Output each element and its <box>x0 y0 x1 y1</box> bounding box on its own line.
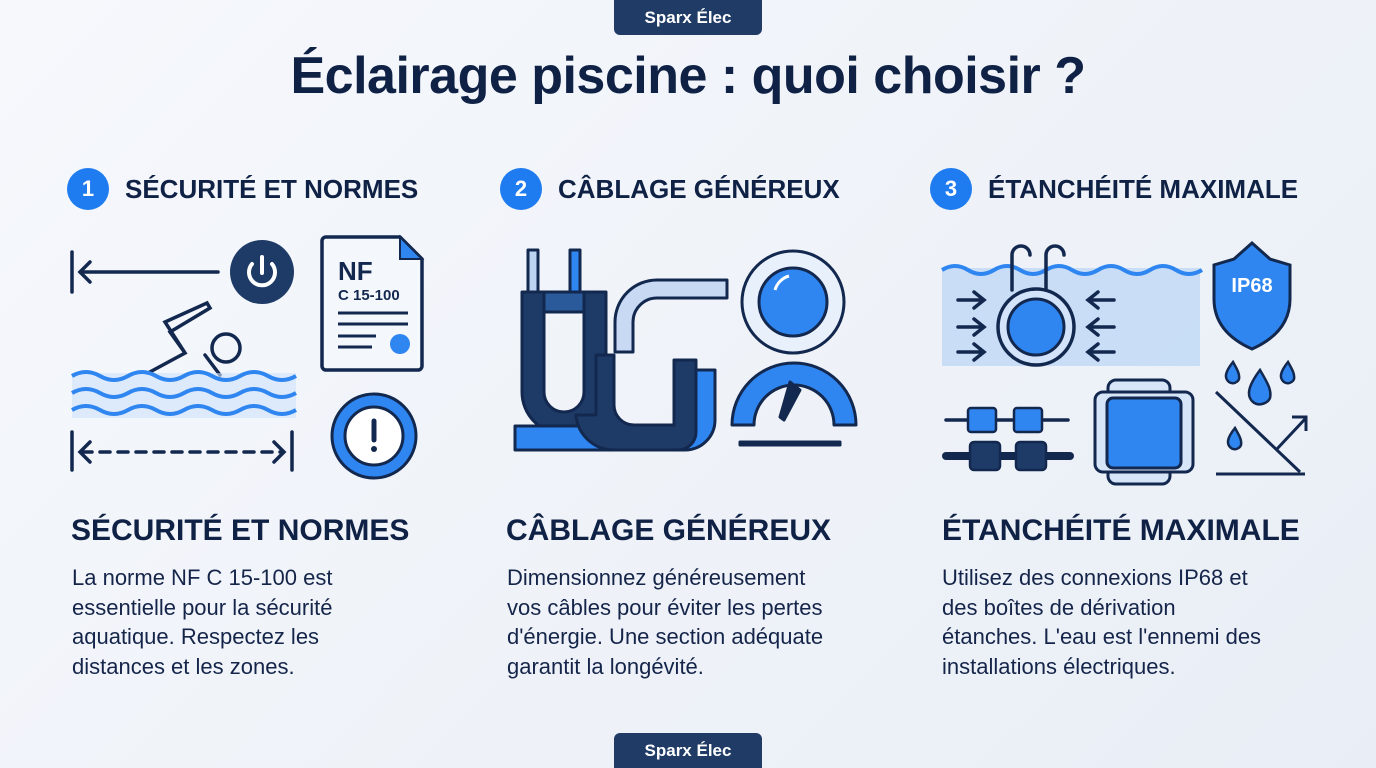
badge bottom <box>614 733 762 768</box>
heading 3 <box>930 168 1298 210</box>
icon group: safety: C 15-100 <box>338 287 400 304</box>
icon group: waterproof: IP68 <box>1231 275 1273 297</box>
badge bottom: Sparx Élec <box>645 741 731 760</box>
badge top: Sparx Élec <box>645 8 731 27</box>
icon group: waterproof <box>941 241 1308 486</box>
heading 1: SÉCURITÉ ET NORMES <box>125 174 418 204</box>
text 1: La norme NF C 15-100 est essentielle pour la sécurité aquatique. Respectez les distances et les zones. <box>72 565 332 678</box>
badge top <box>614 0 762 35</box>
icon group: cabling <box>514 248 858 452</box>
subheading 1: SÉCURITÉ ET NORMES <box>71 514 409 547</box>
heading 3: 3 <box>945 176 957 201</box>
heading 2: 2 <box>515 176 527 201</box>
heading 2 <box>500 168 840 210</box>
heading 3: ÉTANCHÉITÉ MAXIMALE <box>988 174 1298 204</box>
heading 1 <box>67 168 418 210</box>
icon group: safety <box>70 234 424 480</box>
title: Éclairage piscine : quoi choisir ? <box>290 47 1086 105</box>
heading 2: CÂBLAGE GÉNÉREUX <box>558 174 840 204</box>
icon group: safety: NF <box>338 256 373 286</box>
text 2: Dimensionnez généreusement vos câbles pour éviter les pertes d'énergie. Une section adéquate garantit la longévité. <box>507 565 823 678</box>
subheading 3: ÉTANCHÉITÉ MAXIMALE <box>942 514 1300 547</box>
subheading 2: CÂBLAGE GÉNÉREUX <box>506 514 831 547</box>
text 3: Utilisez des connexions IP68 et des boîtes de dérivation étanches. L'eau est l'ennemi des installations électriques. <box>942 565 1261 678</box>
heading 1: 1 <box>82 176 94 201</box>
